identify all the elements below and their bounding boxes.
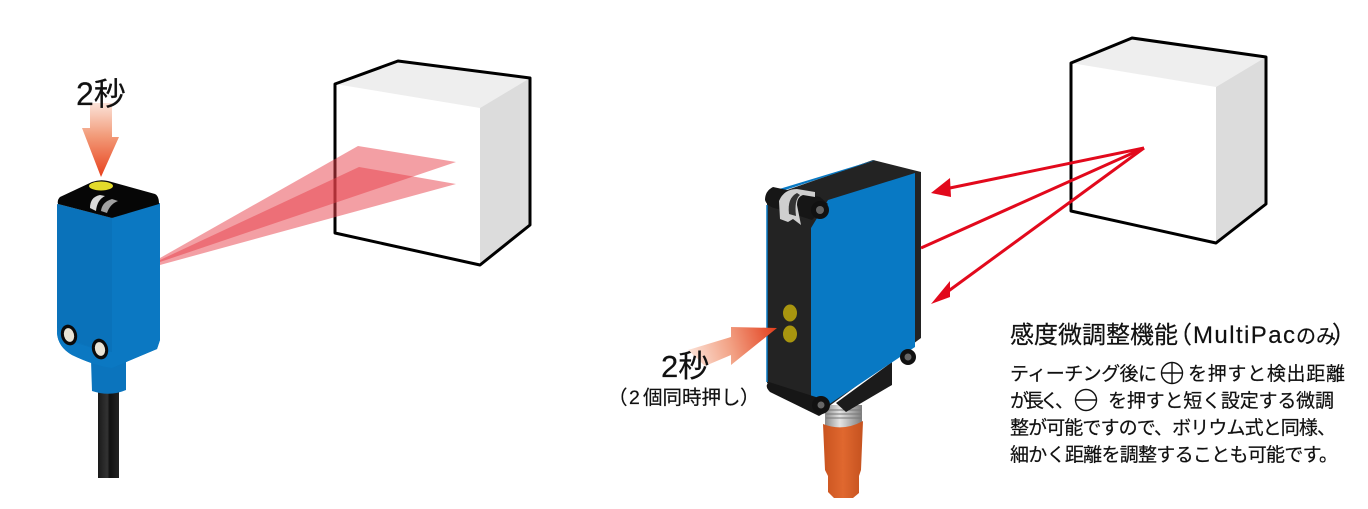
right label: press both: （	[608, 387, 628, 409]
heading: fine sensitivity adjustment: 感度微調整機能	[1010, 322, 1178, 349]
explanation text: を押すと短く設定する微調	[1108, 390, 1334, 412]
right sensor	[765, 160, 921, 498]
yellow buttons	[783, 304, 797, 342]
explanation text: 整が可能ですので、ボリウム式と同様、	[1010, 417, 1336, 439]
explanation text: を押すと検出距離	[1188, 363, 1345, 385]
left target cube	[335, 61, 530, 265]
right press arrow	[688, 327, 777, 366]
sensor neck	[91, 360, 126, 394]
sensor black top	[58, 180, 159, 218]
left label: 2 seconds: 2秒	[76, 76, 126, 112]
left red light beams	[160, 146, 456, 265]
bottom screw	[812, 396, 830, 414]
bottom black bar	[767, 382, 826, 416]
yellow indicator	[89, 182, 113, 190]
heading: fine sensitivity adjustment: （	[1168, 322, 1192, 349]
left press arrow	[82, 103, 119, 177]
sensor black body	[767, 160, 921, 407]
right target cube	[1071, 38, 1266, 243]
explanation text: 細かく距離を調整することも可能です。	[1010, 444, 1338, 466]
heading: fine sensitivity adjustment: MultiPac	[1193, 322, 1295, 349]
silver switch	[90, 195, 105, 211]
right label: 2 seconds: 2秒	[661, 349, 709, 384]
sensor lens holes	[59, 323, 79, 347]
heading: fine sensitivity adjustment: ）	[1332, 322, 1356, 349]
sensor blue body	[57, 203, 160, 368]
right label: press both: ）	[740, 387, 760, 409]
explanation text	[1010, 362, 1345, 466]
explanation text: が長く、	[1010, 390, 1074, 412]
explanation text: ティーチング後に	[1010, 363, 1157, 385]
right label: press both: 2	[629, 387, 640, 409]
sensor blue face	[811, 173, 915, 405]
connector base	[836, 362, 892, 412]
silver clip	[779, 189, 815, 225]
sensor cable	[98, 388, 119, 478]
right label: press both: 個同時押し	[643, 387, 741, 409]
top screw	[811, 201, 829, 219]
icon: plus button	[1162, 362, 1182, 384]
icon: minus button	[1076, 390, 1096, 410]
red reflected arrows	[921, 148, 1144, 304]
connector cable	[823, 405, 863, 498]
top hinge bar	[765, 187, 828, 220]
left sensor	[57, 180, 160, 478]
heading: fine sensitivity adjustment: のみ	[1296, 326, 1336, 348]
right screw	[900, 349, 916, 365]
